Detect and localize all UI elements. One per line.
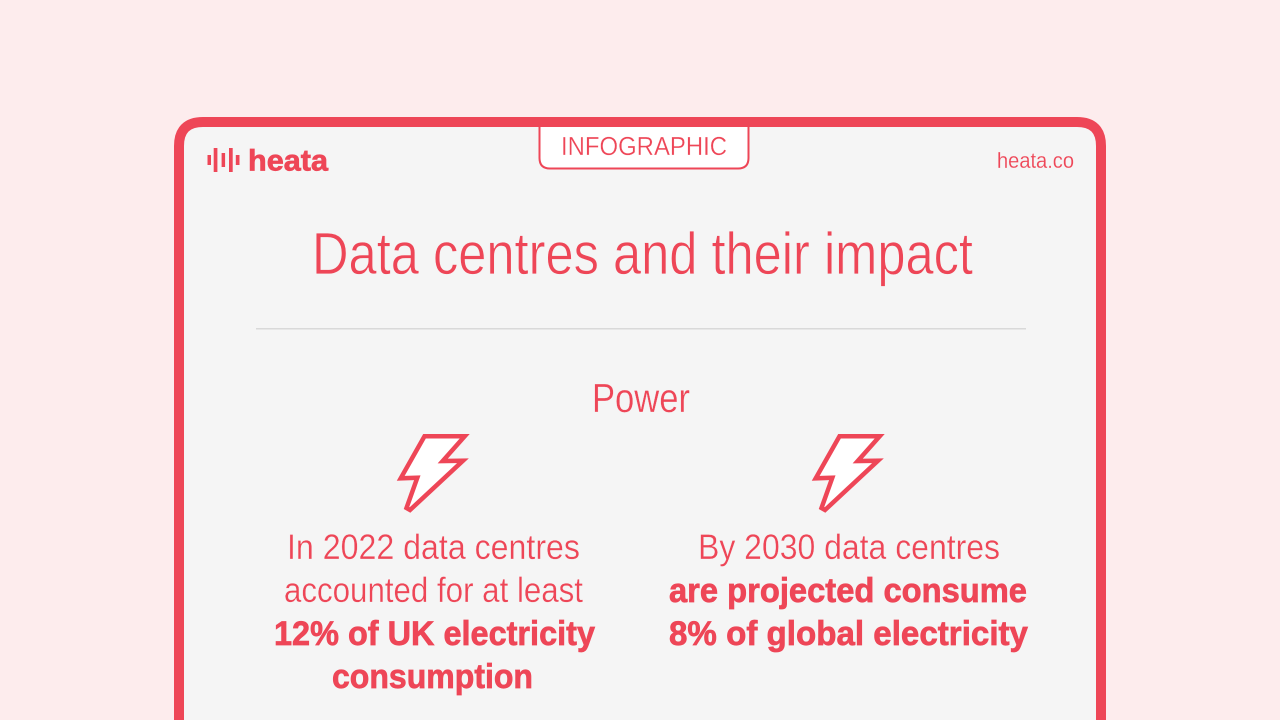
text block: global electricity [669, 528, 1028, 653]
logo: heata [208, 144, 328, 178]
text block: UK electricity: accounted for at least [284, 571, 583, 610]
tab: infographic: INFOGRAPHIC [561, 131, 727, 161]
logo: heata: heata [248, 144, 328, 178]
text block: UK electricity: In 2022 data centres [287, 528, 580, 567]
section heading: power: Power [592, 375, 690, 421]
text block: UK electricity: consumption [332, 658, 533, 696]
text block: global electricity: 8% of global electricity [669, 615, 1028, 653]
icon: lightning bolt right [816, 436, 880, 510]
website link: heata.co [997, 148, 1074, 173]
title: Data centres and their impact [312, 221, 973, 287]
card panel [179, 122, 1101, 720]
icon: lightning bolt left [401, 436, 465, 510]
text block: UK electricity: 12% of UK electricity [274, 615, 595, 653]
text block: global electricity: By 2030 data centres [698, 528, 1000, 567]
text block: global electricity: are projected consume [669, 572, 1027, 610]
text block: UK electricity [274, 528, 595, 696]
tab: infographic [540, 127, 748, 168]
